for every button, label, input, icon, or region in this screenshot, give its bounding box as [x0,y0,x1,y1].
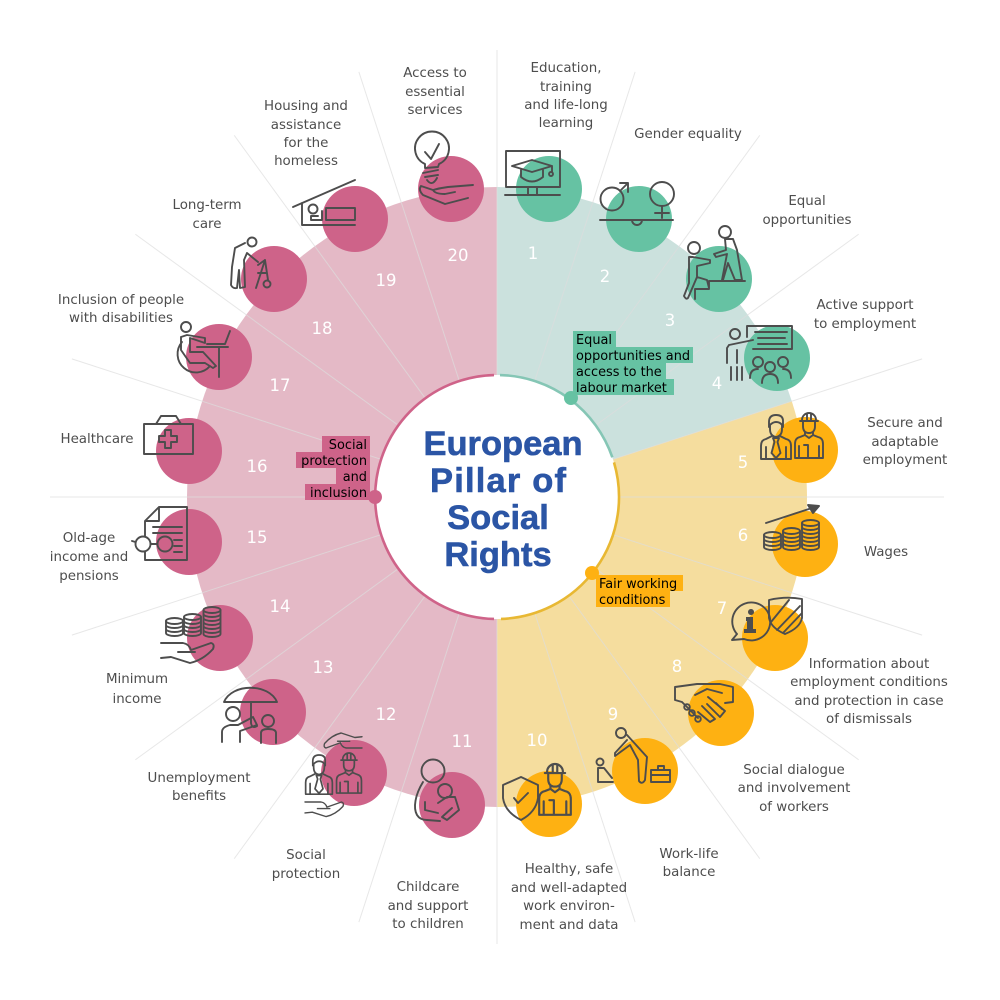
item 8: social dialogue [672,657,850,815]
item 8: social dialogue: of workers [759,800,829,815]
icon: first aid kit [144,416,193,454]
category: fair working conditions: conditions [599,593,666,608]
icon: coins over a hand [161,607,220,663]
item 19: housing: homeless [274,154,338,169]
item 1: education: and life-long [524,98,608,113]
category: social protection and inclusion [296,436,382,504]
item 5: secure and adaptable employment: adaptable [871,435,939,450]
item 15: old-age income: 15 [246,528,268,547]
item 3: equal opportunities [665,194,852,330]
item 12: social protection [272,705,396,882]
item 3: equal opportunities: opportunities [762,213,852,228]
item 18: long-term care: Long-term [172,198,242,213]
icon: adult bending to child with briefcase [596,728,670,783]
item 11: childcare: 11 [452,732,472,751]
item 20: access to essential services: essential [405,85,465,100]
item 10: healthy, safe working environment: Healthy, safe [525,862,613,877]
item 19: housing: assistance [271,118,341,133]
title [423,425,583,574]
item 13: unemployment benefits [148,658,334,804]
item 7: information about employment conditions: employment conditions [790,675,948,690]
item 16: healthcare [60,416,268,484]
item 4: active support to employment: to employment [814,317,916,332]
icon: presenter and audience [727,326,792,383]
item 10: healthy, safe working environment [503,731,627,933]
item 20: access to essential services: services [408,103,462,118]
category: equal opportunities and access to the labour market: opportunities and [576,349,690,364]
item 11: childcare: to children [392,917,464,932]
item 2: gender equality: 2 [600,267,610,286]
category: social protection and inclusion: protection [301,454,367,469]
item 20: access to essential services: 20 [448,246,468,265]
item 12: social protection: 12 [376,705,396,724]
item 7: information about employment conditions: 7 [717,599,727,618]
icon: shield and worker [503,764,571,820]
icon: bed under a roof [293,180,355,225]
item 8: social dialogue: 8 [672,657,682,676]
icon: graduation cap on monitor [505,151,560,195]
item 15: old-age income [50,507,268,584]
icon: light bulb over a hand [415,132,473,204]
item 8: social dialogue: Social dialogue [743,763,845,778]
item 5: secure and adaptable employment: 5 [738,453,748,472]
item 9: work-life balance: 9 [608,705,618,724]
item 7: information about employment conditions: Information about [809,657,929,672]
icon: gender symbols on balance [600,182,674,225]
item 10: healthy, safe working environment: ment and data [520,918,618,933]
item 6: wages: Wages [864,545,908,560]
item 7: information about employment conditions: and protection in case [794,694,944,709]
category: social protection and inclusion: inclusion [310,486,367,501]
item 13: unemployment benefits: benefits [172,789,226,804]
icon: hands protecting employees [305,733,362,817]
category: fair working conditions: Fair working [599,577,677,592]
item 14: minimum income: Minimum [106,672,168,687]
icon: wheelchair user at desk [178,322,230,377]
sector: social protection [187,187,497,807]
icon: mother holding child [415,760,459,821]
item 1: education: Education, [531,61,601,76]
item 9: work-life balance [596,705,719,880]
item 7: information about employment conditions [717,598,948,727]
item 14: minimum income: 14 [270,597,290,616]
item 15: old-age income: income and [50,550,128,565]
icon: coins with rising arrow [764,505,819,550]
item 15: old-age income: Old-age [63,531,115,546]
item 11: childcare [388,732,485,932]
item 4: active support to employment [712,298,916,393]
item 19: housing: Housing and [264,99,348,114]
item 7: information about employment conditions: of dismissals [826,712,912,727]
item 18: long-term care: care [192,217,222,232]
item 4: active support to employment: Active support [816,298,914,313]
item 10: healthy, safe working environment: work environ- [523,899,615,914]
title: Social [447,499,549,537]
item 1: education: 1 [528,244,538,263]
category: equal opportunities and access to the labour market: access to the [576,365,662,380]
item 17: inclusion of people with disabilities: Inclusion of people [58,293,184,308]
sector: equal opportunities [497,187,792,497]
category: equal opportunities and access to the labour market: Equal [576,333,612,348]
item 14: minimum income [106,597,290,707]
sector: fair working conditions [497,401,807,807]
icon: document and glasses [132,507,187,560]
item 17: inclusion of people with disabilities: 17 [270,376,290,395]
item 19: housing: 19 [376,271,396,290]
item 19: housing [264,99,396,290]
item 17: inclusion of people with disabilities: with disabilities [69,311,173,326]
item 16: healthcare: 16 [246,457,268,476]
item 5: secure and adaptable employment [738,413,947,483]
category: social protection and inclusion: Social [329,438,367,453]
item 1: education: learning [539,116,593,131]
ring segment: pink [375,375,494,619]
category: equal opportunities and access to the labour market: labour market [576,381,667,396]
item 13: unemployment benefits: 13 [312,658,334,677]
item 11: childcare: Childcare [397,880,459,895]
item 6: wages [738,505,908,577]
icon: umbrella over adult and child [222,688,277,743]
title: European [423,425,583,463]
ring segment: teal [500,375,612,457]
item 8: social dialogue: and involvement [738,781,850,796]
item 4: active support to employment: 4 [712,374,722,393]
item 17: inclusion of people with disabilities [58,293,290,395]
item 13: unemployment benefits: Unemployment [148,771,250,786]
item 12: social protection: protection [272,867,340,882]
item 18: long-term care: 18 [312,319,332,338]
central white disc [375,375,619,619]
item 1: education: training [540,80,592,95]
item 12: social protection: Social [286,848,326,863]
item 20: access to essential services: Access to [403,66,467,81]
item 11: childcare: and support [388,899,468,914]
item 9: work-life balance: Work-life [659,847,719,862]
icon: person helping another up stairs [684,226,745,299]
category: fair working conditions [585,566,683,608]
category: social protection and inclusion: and [343,470,367,485]
item 19: housing: for the [284,136,328,151]
title: Pillar of [430,462,566,500]
item 1: education [505,61,608,263]
category: equal opportunities and access to the labour market [564,331,693,405]
item 2: gender equality [600,127,742,286]
item 14: minimum income: income [112,692,162,707]
item 2: gender equality: Gender equality [634,127,742,142]
ring segment: yellow [501,462,619,619]
item 18: long-term care [172,198,332,338]
item 10: healthy, safe working environment: and well-adapted [511,881,627,896]
item 3: equal opportunities: Equal [788,194,826,209]
title: Rights [444,536,552,574]
item 5: secure and adaptable employment: Secure and [867,416,943,431]
icon: businessman and worker [761,413,823,459]
item 15: old-age income: pensions [59,569,119,584]
item 3: equal opportunities: 3 [665,311,675,330]
item 20: access to essential services [403,66,484,265]
item 10: healthy, safe working environment: 10 [526,731,548,750]
icon: handshake [675,684,733,722]
item 16: healthcare: Healthcare [60,432,134,447]
icon: person with walker [231,238,270,288]
item 5: secure and adaptable employment: employment [863,453,947,468]
item 6: wages: 6 [738,526,748,545]
item 9: work-life balance: balance [663,865,715,880]
icon: info bubble and shield [732,598,802,640]
